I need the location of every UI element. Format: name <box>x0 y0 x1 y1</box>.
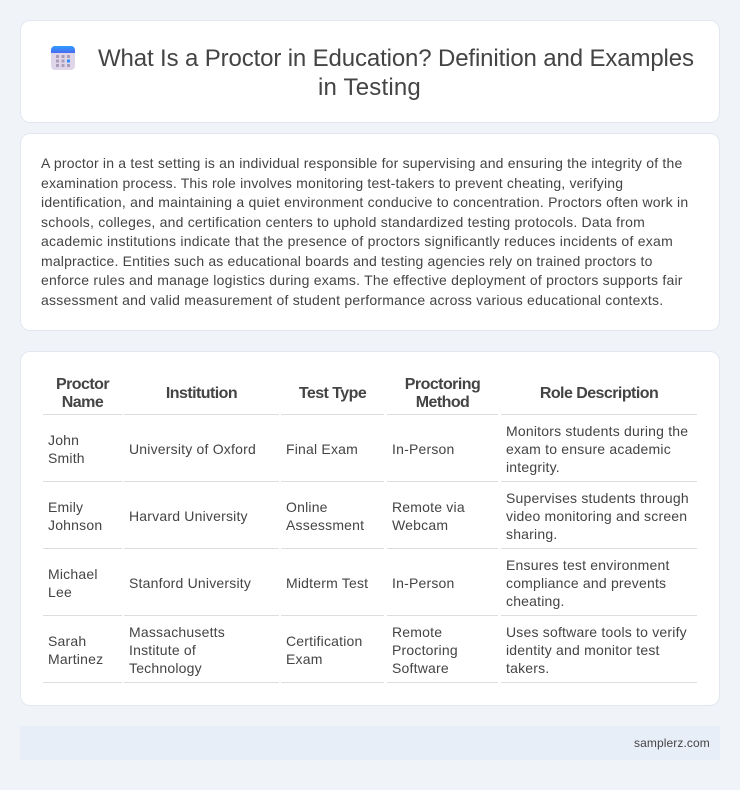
row: Sarah Martinez: Certification <box>286 633 363 649</box>
paragraph text: malpractice. Entities such as educational boards and testing agencies rely on trained proctors to <box>41 252 653 268</box>
table header: Role Description <box>540 385 658 402</box>
paragraph text: academic institutions indicate that the presence of proctors significantly reduces incidents of exam <box>41 233 673 249</box>
paragraph text: examination process. This role involves monitoring test-takers to prevent cheating, verifying <box>41 174 623 190</box>
row: Emily Johnson: Emily <box>48 499 83 515</box>
table header: Institution <box>166 385 237 402</box>
table header: Proctor <box>56 376 109 393</box>
row: Sarah Martinez <box>48 624 687 676</box>
row: Sarah Martinez: Technology <box>129 660 202 676</box>
icon: calendar <box>51 46 75 70</box>
paragraph text: assessment and valid measurement of student performance across various educational contexts. <box>41 292 663 308</box>
row: John Smith: Monitors students during the <box>506 423 688 439</box>
row: Michael Lee: Ensures test environment <box>506 557 670 573</box>
row: Emily Johnson: Webcam <box>392 517 448 533</box>
row: Sarah Martinez: Martinez <box>48 651 103 667</box>
row lines <box>43 414 697 683</box>
row: Michael Lee: Michael <box>48 566 98 582</box>
row: Sarah Martinez: Exam <box>286 651 323 667</box>
footer bar <box>20 726 720 760</box>
row: Sarah Martinez: identity and monitor test <box>506 642 660 658</box>
row: Emily Johnson <box>48 490 689 542</box>
paragraph text <box>41 155 688 308</box>
row: Sarah Martinez: Remote <box>392 624 442 640</box>
row: Emily Johnson: Harvard University <box>129 508 248 524</box>
table header: Method <box>416 394 469 411</box>
row: Emily Johnson: Online <box>286 499 328 515</box>
row: Sarah Martinez: Massachusetts <box>129 624 225 640</box>
row: Emily Johnson: video monitoring and screen <box>506 508 687 524</box>
table header: Test Type <box>299 385 366 402</box>
paragraph text: A proctor in a test setting is an individual responsible for supervising and ensuring the integrity of the <box>41 155 682 171</box>
row: John Smith: exam to ensure academic <box>506 441 671 457</box>
row: Emily Johnson: Johnson <box>48 517 102 533</box>
row: Emily Johnson: Supervises students through <box>506 490 689 506</box>
table header: Proctoring <box>405 376 480 393</box>
row: Michael Lee: Lee <box>48 584 72 600</box>
row: Emily Johnson: Remote via <box>392 499 465 515</box>
row: Michael Lee: Stanford University <box>129 575 251 591</box>
row: John Smith: In-Person <box>392 441 454 457</box>
row: Sarah Martinez: Software <box>392 660 449 676</box>
row: Michael Lee <box>48 557 670 609</box>
row: Sarah Martinez: Sarah <box>48 633 86 649</box>
row: John Smith: Smith <box>48 450 85 466</box>
row: Michael Lee: compliance and prevents <box>506 575 666 591</box>
row: John Smith: Final Exam <box>286 441 358 457</box>
row: Emily Johnson: sharing. <box>506 526 557 542</box>
row: Sarah Martinez: Proctoring <box>392 642 458 658</box>
row: Emily Johnson: Assessment <box>286 517 364 533</box>
row: John Smith: John <box>48 432 79 448</box>
footer source: samplerz.com <box>634 736 710 750</box>
table header <box>56 376 658 411</box>
row: Michael Lee: Midterm Test <box>286 575 368 591</box>
header panel <box>20 20 720 123</box>
row: John Smith <box>48 423 688 475</box>
row: Sarah Martinez: Institute of <box>129 642 196 658</box>
row: Sarah Martinez: Uses software tools to verify <box>506 624 687 640</box>
panel: definition paragraph <box>20 133 720 331</box>
title: What Is a Proctor in Education? Definition and Examples <box>98 45 694 72</box>
panel: proctor table <box>20 351 720 706</box>
paragraph text: schools, colleges, and certification centers to uphold standardized testing protocols. Data from <box>41 214 645 230</box>
title second line: in Testing <box>318 74 421 101</box>
row: Sarah Martinez: takers. <box>506 660 549 676</box>
paragraph text: enforce rules and manage logistics during exams. The effective deployment of proctors supports fair <box>41 272 683 288</box>
paragraph text: identification, and maintaining a quiet environment conducive to concentration. Proctors often work in <box>41 194 688 210</box>
table header: Name <box>62 394 103 411</box>
row: John Smith: University of Oxford <box>129 441 256 457</box>
row: John Smith: integrity. <box>506 459 560 475</box>
row: Michael Lee: cheating. <box>506 593 565 609</box>
row: Michael Lee: In-Person <box>392 575 454 591</box>
